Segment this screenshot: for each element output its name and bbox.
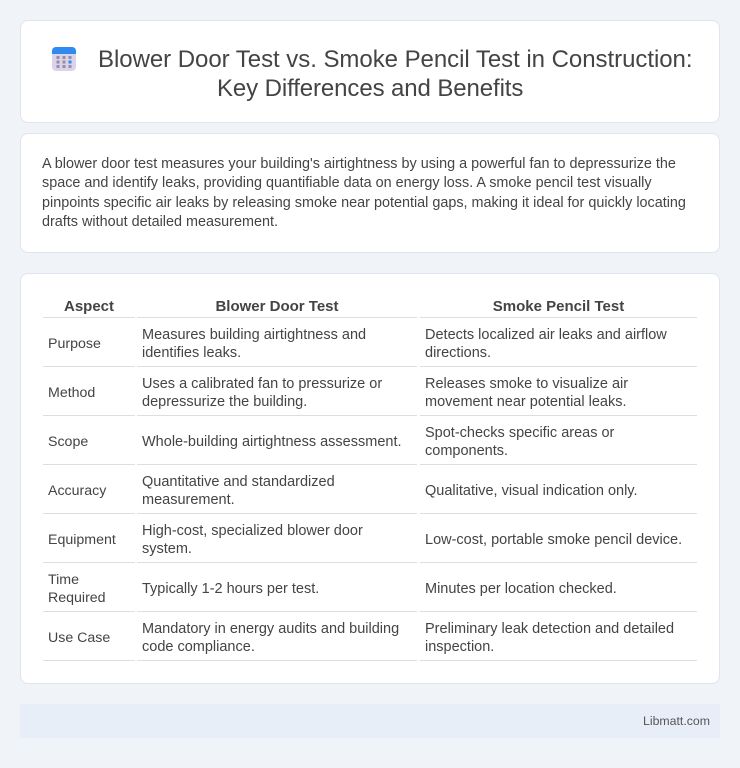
intro text panel	[20, 133, 720, 253]
row: Purpose: directions.	[425, 345, 491, 361]
row: Use Case: Use Case	[48, 630, 110, 646]
intro paragraph: A blower door test measures your building's airtightness by using a powerful fan to depressurize the	[42, 156, 676, 172]
row: Purpose: Measures building airtightness and	[142, 327, 366, 343]
intro paragraph: drafts without detailed measurement.	[42, 214, 278, 230]
row: Method: movement near potential leaks.	[425, 394, 626, 410]
row: Accuracy: Accuracy	[48, 483, 106, 499]
row: Purpose	[43, 327, 697, 367]
row: Scope: Scope	[48, 434, 88, 450]
row: Time Required: Required	[48, 590, 106, 606]
row: Method: Uses a calibrated fan to pressurize or	[142, 376, 382, 392]
row: Method: Releases smoke to visualize air	[425, 376, 628, 392]
heading: Key Differences and Benefits	[217, 75, 523, 102]
row: Use Case: code compliance.	[142, 639, 255, 655]
table header: Blower Door Test	[215, 298, 339, 315]
comparison table panel	[20, 273, 720, 684]
heading: Blower Door Test vs. Smoke Pencil Test in Construction:	[98, 46, 692, 73]
row: Method: Method	[48, 385, 95, 401]
row: Time Required	[43, 572, 697, 612]
icon: calendar	[52, 47, 76, 71]
heading	[98, 46, 692, 102]
row: Time Required: Minutes per location checked.	[425, 581, 617, 597]
row: Time Required: Typically 1-2 hours per test.	[142, 581, 319, 597]
table header: Smoke Pencil Test	[493, 298, 624, 315]
row: Equipment: Equipment	[48, 532, 116, 548]
table header: Aspect	[64, 298, 114, 315]
row: Scope: components.	[425, 443, 508, 459]
row: Method: depressurize the building.	[142, 394, 307, 410]
intro paragraph: pinpoints specific air leaks by releasing smoke near potential gaps, making it ideal for quickly locating	[42, 195, 686, 211]
row: Use Case: Mandatory in energy audits and building	[142, 621, 399, 637]
row: Purpose: Purpose	[48, 336, 101, 352]
footer credit: Libmatt.com	[643, 714, 710, 728]
row: Scope	[43, 425, 697, 465]
row: Equipment: Low-cost, portable smoke pencil device.	[425, 532, 682, 548]
row: Purpose: Detects localized air leaks and airflow	[425, 327, 667, 343]
row: Use Case: Preliminary leak detection and detailed	[425, 621, 674, 637]
intro paragraph: space and identify leaks, providing quantifiable data on energy loss. A smoke pencil test visually	[42, 175, 652, 191]
row: Accuracy: measurement.	[142, 492, 235, 508]
row: Use Case: inspection.	[425, 639, 494, 655]
row: Accuracy	[43, 474, 697, 514]
row: Equipment: High-cost, specialized blower door	[142, 523, 363, 539]
row: Accuracy: Quantitative and standardized	[142, 474, 335, 490]
row: Purpose: identifies leaks.	[142, 345, 241, 361]
row: Method	[43, 376, 697, 416]
row: Time Required: Time	[48, 572, 79, 588]
intro paragraph	[42, 156, 686, 230]
row: Use Case	[43, 621, 697, 661]
title panel	[20, 20, 720, 123]
row: Scope: Spot-checks specific areas or	[425, 425, 614, 441]
table header	[43, 298, 697, 318]
row: Scope: Whole-building airtightness assessment.	[142, 434, 402, 450]
row: Accuracy: Qualitative, visual indication only.	[425, 483, 638, 499]
footer bar	[20, 704, 720, 738]
row: Equipment: system.	[142, 541, 192, 557]
row: Equipment	[43, 523, 697, 563]
